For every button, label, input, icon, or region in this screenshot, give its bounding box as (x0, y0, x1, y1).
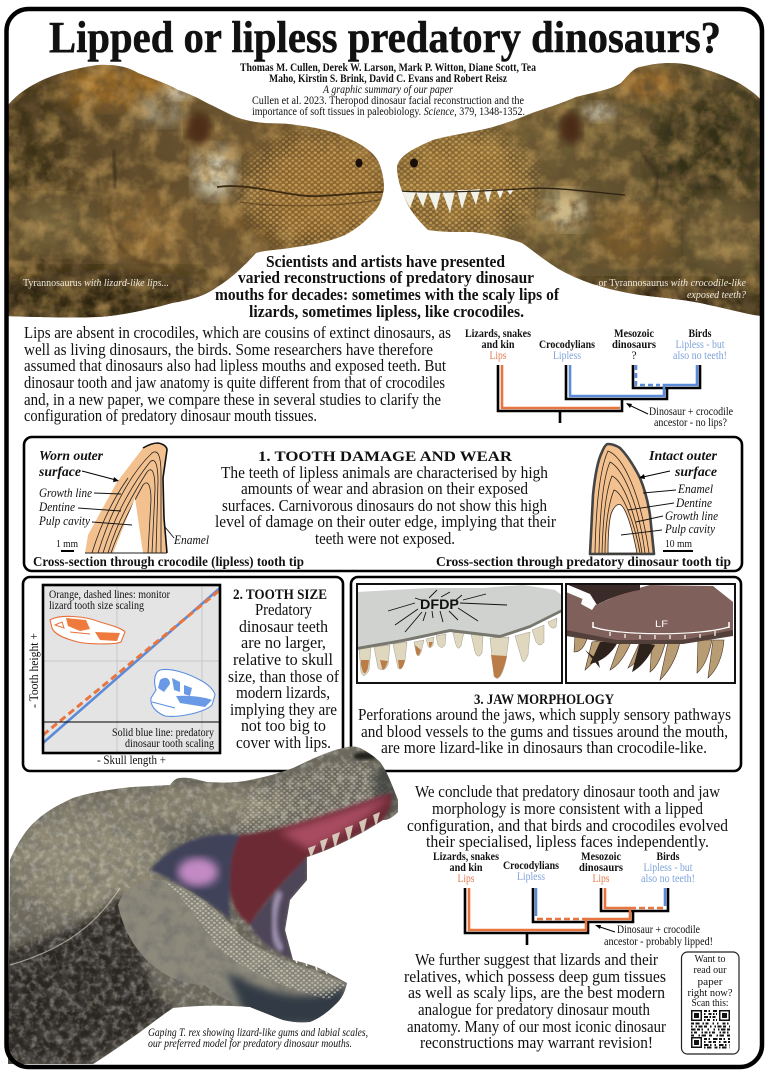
panel 1 text: The teeth of lipless animals are characterised by high (221, 463, 549, 482)
crocodile tooth labels (38, 449, 209, 552)
panel 2 text: implying they are (230, 700, 337, 719)
intro bold paragraph: lizards, sometimes lipless, like crocodiles. (249, 302, 524, 321)
final paragraph: We further suggest that lizards and their (415, 950, 658, 969)
panel 2: tooth size (23, 577, 343, 771)
cladogram: lipped ancestor conclusion: Lips (458, 873, 475, 885)
panel 2 text: Predatory (255, 600, 313, 619)
body paragraph: background: dinosaur tooth and jaw anatomy is quite different from that of crocodiles (24, 373, 445, 392)
panel 2 text: not too big to (241, 716, 326, 735)
icon: QR code (691, 1010, 730, 1048)
panel 2 text: modern lizards, (236, 683, 330, 702)
conclusion paragraph: their specialised, lipless faces independently. (426, 832, 709, 851)
panel 1: tooth damage and wear (24, 437, 742, 571)
panel 3 text: 3. JAW MORPHOLOGY (474, 692, 614, 708)
icon: T. rex skull (151, 669, 215, 716)
cladogram: hypothesis of lipless ancestor: also no teeth! (673, 350, 727, 362)
crocodile tooth labels: 1 mm (56, 539, 78, 550)
conclusion paragraph: configuration, and that birds and crocodiles evolved (407, 816, 729, 835)
body paragraph: background: well as living dinosaurs, the birds. Some researchers have therefore (24, 340, 433, 359)
title: Lipped or lipless predatory dinosaurs? (49, 13, 721, 62)
body paragraph: background: configuration of predatory dinosaur mouth tissues. (24, 406, 317, 425)
cladogram: lipped ancestor conclusion (433, 851, 713, 948)
body paragraph: background: and, in a new paper, we compare these in several studies to clarify the (24, 390, 441, 409)
caption: lipless head: ...or Tyrannosaurus with crocodile-like (591, 277, 746, 289)
conclusion paragraph: We conclude that predatory dinosaur tooth and jaw (415, 782, 721, 801)
panel 2 text: relative to skull (233, 650, 333, 669)
cladogram: hypothesis of lipless ancestor: ? (631, 350, 637, 362)
authors and citation: Cullen et al. 2023. Theropod dinosaur facial reconstruction and the (252, 95, 524, 107)
cladogram: lipped ancestor conclusion: Lips (592, 873, 610, 885)
authors and citation: A graphic summary of our paper (322, 84, 453, 96)
dinosaur tooth labels: surface (674, 465, 717, 480)
crocodile tooth labels: Dentine (38, 500, 75, 514)
panel 2 text: size, than those of (228, 667, 339, 686)
final paragraph: relatives, which possess deep gum tissues (404, 967, 666, 986)
callout: QR code box: right now? (688, 987, 733, 999)
dinosaur tooth diagram (590, 444, 718, 554)
callout: QR code box: read our (694, 964, 727, 976)
panel 1 text: level of damage on their outer edge, implying that their (215, 512, 556, 531)
cladogram: hypothesis of lipless ancestor: Lipless (553, 350, 581, 362)
intro bold paragraph (215, 252, 559, 321)
cladogram: lipped ancestor conclusion: Dinosaur + crocodile (617, 924, 700, 936)
panel 1 text: surfaces. Carnivorous dinosaurs do not show this high (222, 496, 548, 515)
body paragraph: background: assumed that dinosaurs also had lipless mouths and exposed teeth. But (24, 356, 446, 375)
icon: monitor lizard skull (50, 616, 125, 644)
callout: QR code box (682, 952, 739, 1054)
cladogram: hypothesis of lipless ancestor: Lizards, snakes (465, 328, 531, 340)
dinosaur tooth labels: Dentine (675, 496, 712, 510)
panel 1 text: teeth were not exposed. (315, 529, 455, 548)
caption: lipped head: Tyrannosaurus with lizard-like lips... (23, 277, 169, 289)
scatter scaling chart (43, 585, 220, 753)
cladogram: lipped ancestor conclusion: Lipless - but (644, 862, 693, 874)
cladogram: hypothesis of lipless ancestor: dinosaurs (612, 339, 656, 351)
axis label y: - Tooth height + (26, 633, 41, 708)
cladogram: hypothesis of lipless ancestor: Lipless - but (676, 339, 725, 351)
dinosaur tooth labels: Growth line (665, 509, 718, 523)
scatter scaling chart: dinosaur tooth scaling (125, 738, 214, 750)
intro bold paragraph: mouths for decades: sometimes with the scaly lips of (215, 285, 559, 304)
crocodile tooth diagram (38, 443, 209, 553)
caption: gaping T. rex: Gaping T. rex showing lizard-like gums and labial scales, (148, 1025, 368, 1039)
crocodile tooth labels: surface (38, 465, 81, 480)
panel 1 text (215, 449, 556, 548)
dinosaur tooth labels: Intact outer (648, 449, 718, 464)
panel 3 text: are more lizard-like in dinosaurs than crocodile-like. (381, 738, 707, 757)
dinosaur tooth labels: Pulp cavity (664, 522, 715, 536)
cladogram: lipped ancestor conclusion: Crocodylians (503, 860, 559, 872)
photo: lizard-like jaw with DFDP foramina: DFDP (420, 596, 459, 612)
lower jaw (10, 880, 347, 1022)
dinosaur tooth caption: Cross-section through predatory dinosaur tooth tip (436, 555, 731, 570)
panel 2 text (228, 587, 339, 752)
scatter scaling chart: Solid blue line: predatory (112, 727, 214, 739)
conclusion paragraph: morphology is more consistent with a lipped (432, 799, 704, 818)
dinosaur tooth labels (621, 449, 718, 552)
mouth interior (150, 793, 392, 960)
illustration: Tyrannosaurus head with lizard-like lips (0, 60, 390, 330)
dinosaur tooth labels: 10 mm (665, 539, 692, 550)
callout: QR code box: paper (698, 976, 723, 988)
cladogram: hypothesis of lipless ancestor: Mesozoic (614, 328, 654, 340)
panel 2 text: are no larger, (241, 633, 326, 652)
panel 1 text: 1. TOOTH DAMAGE AND WEAR (258, 449, 512, 465)
cladogram: lipped ancestor conclusion: ancestor - probably lipped! (604, 936, 713, 948)
cladogram: hypothesis of lipless ancestor: Birds (688, 328, 712, 340)
cladogram: hypothesis of lipless ancestor (465, 328, 733, 429)
intro bold paragraph: Scientists and artists have presented (266, 252, 505, 271)
panel 1 text: amounts of wear and abrasion on their exposed (241, 479, 529, 498)
cladogram: lipped ancestor conclusion: Lipless (517, 871, 545, 883)
cladogram: lipped ancestor conclusion: dinosaurs (579, 862, 623, 874)
caption: lipless head (591, 277, 746, 301)
callout: QR code box: Scan this: (692, 997, 728, 1009)
callout: QR code box: Want to (694, 953, 726, 965)
panel 3: jaw morphology (351, 577, 741, 771)
panel 3 text: Perforations around the jaws, which supply sensory pathways (358, 705, 731, 724)
body paragraph: background (24, 323, 451, 425)
panel 3 text: and blood vessels to the gums and tissues around the mouth, (361, 722, 728, 741)
final paragraph: anatomy. Many of our most iconic dinosaur (407, 1017, 666, 1036)
cladogram: hypothesis of lipless ancestor: Crocodylians (539, 339, 595, 351)
cladogram: hypothesis of lipless ancestor: and kin (482, 339, 515, 351)
photo: lizard-like jaw with DFDP foramina (357, 584, 562, 683)
crocodile tooth labels: Growth line (39, 486, 92, 500)
cladogram: lipped ancestor conclusion: and kin (450, 862, 483, 874)
illustration: gaping T. rex with lizard-like gums (0, 745, 400, 1070)
upper teeth (308, 812, 380, 858)
panel 3 text (358, 692, 731, 757)
panel 2 text: dinosaur teeth (239, 617, 329, 636)
cladogram: hypothesis of lipless ancestor: Dinosaur + crocodile (649, 406, 733, 418)
caption: gaping T. rex (148, 1025, 368, 1050)
crocodile tooth caption: Cross-section through crocodile (lipless) tooth tip (33, 555, 304, 570)
axis label x: - Skull length + (97, 752, 166, 767)
crocodile tooth labels: Pulp cavity (38, 514, 90, 528)
panel 2 text: 2. TOOTH SIZE (233, 587, 327, 603)
intro bold paragraph: varied reconstructions of predatory dinosaur (238, 268, 534, 287)
cladogram: lipped ancestor conclusion: Birds (656, 851, 680, 863)
authors and citation: importance of soft tissues in paleobiology. Science, 379, 1348-1352. (252, 106, 525, 118)
conclusion paragraph (407, 782, 729, 851)
photo: T. rex jaw with LF foramina (566, 584, 735, 683)
final paragraph: reconstructions may warrant revision! (420, 1033, 653, 1052)
cladogram: lipped ancestor conclusion: Lizards, snakes (433, 851, 499, 863)
caption: gaping T. rex: our preferred model for predatory dinosaur mouths. (148, 1036, 352, 1050)
cladogram: lipped ancestor conclusion: also no teeth! (641, 873, 695, 885)
photo: T. rex jaw with LF foramina: LF (655, 619, 668, 630)
dinosaur tooth labels: Enamel (677, 482, 713, 496)
authors and citation (240, 62, 536, 118)
final paragraph: as well as scaly lips, are the best modern (408, 983, 666, 1002)
crocodile tooth labels: Enamel (173, 533, 209, 547)
caption: lipless head: exposed teeth? (687, 289, 746, 301)
crocodile tooth labels: Worn outer (39, 449, 104, 464)
illustration: Tyrannosaurus head with crocodile-like exposed teeth (390, 60, 768, 320)
final paragraph (404, 950, 666, 1052)
final paragraph: analogue for predatory dinosaur mouth (418, 1000, 651, 1019)
cladogram: lipped ancestor conclusion: Mesozoic (581, 851, 621, 863)
cladogram: hypothesis of lipless ancestor: ancestor - no lips? (654, 417, 727, 429)
cladogram: hypothesis of lipless ancestor: Lips (490, 350, 507, 362)
body paragraph: background: Lips are absent in crocodiles, which are cousins of extinct dinosaurs, as (24, 323, 451, 342)
authors and citation: Thomas M. Cullen, Derek W. Larson, Mark P. Witton, Diane Scott, Tea (240, 62, 536, 74)
panel 2 text: cover with lips. (236, 733, 331, 752)
scatter scaling chart: lizard tooth size scaling (49, 600, 144, 612)
scatter scaling chart: Orange, dashed lines: monitor (49, 589, 170, 601)
authors and citation: Maho, Kirstin S. Brink, David C. Evans and Robert Reisz (269, 73, 507, 85)
